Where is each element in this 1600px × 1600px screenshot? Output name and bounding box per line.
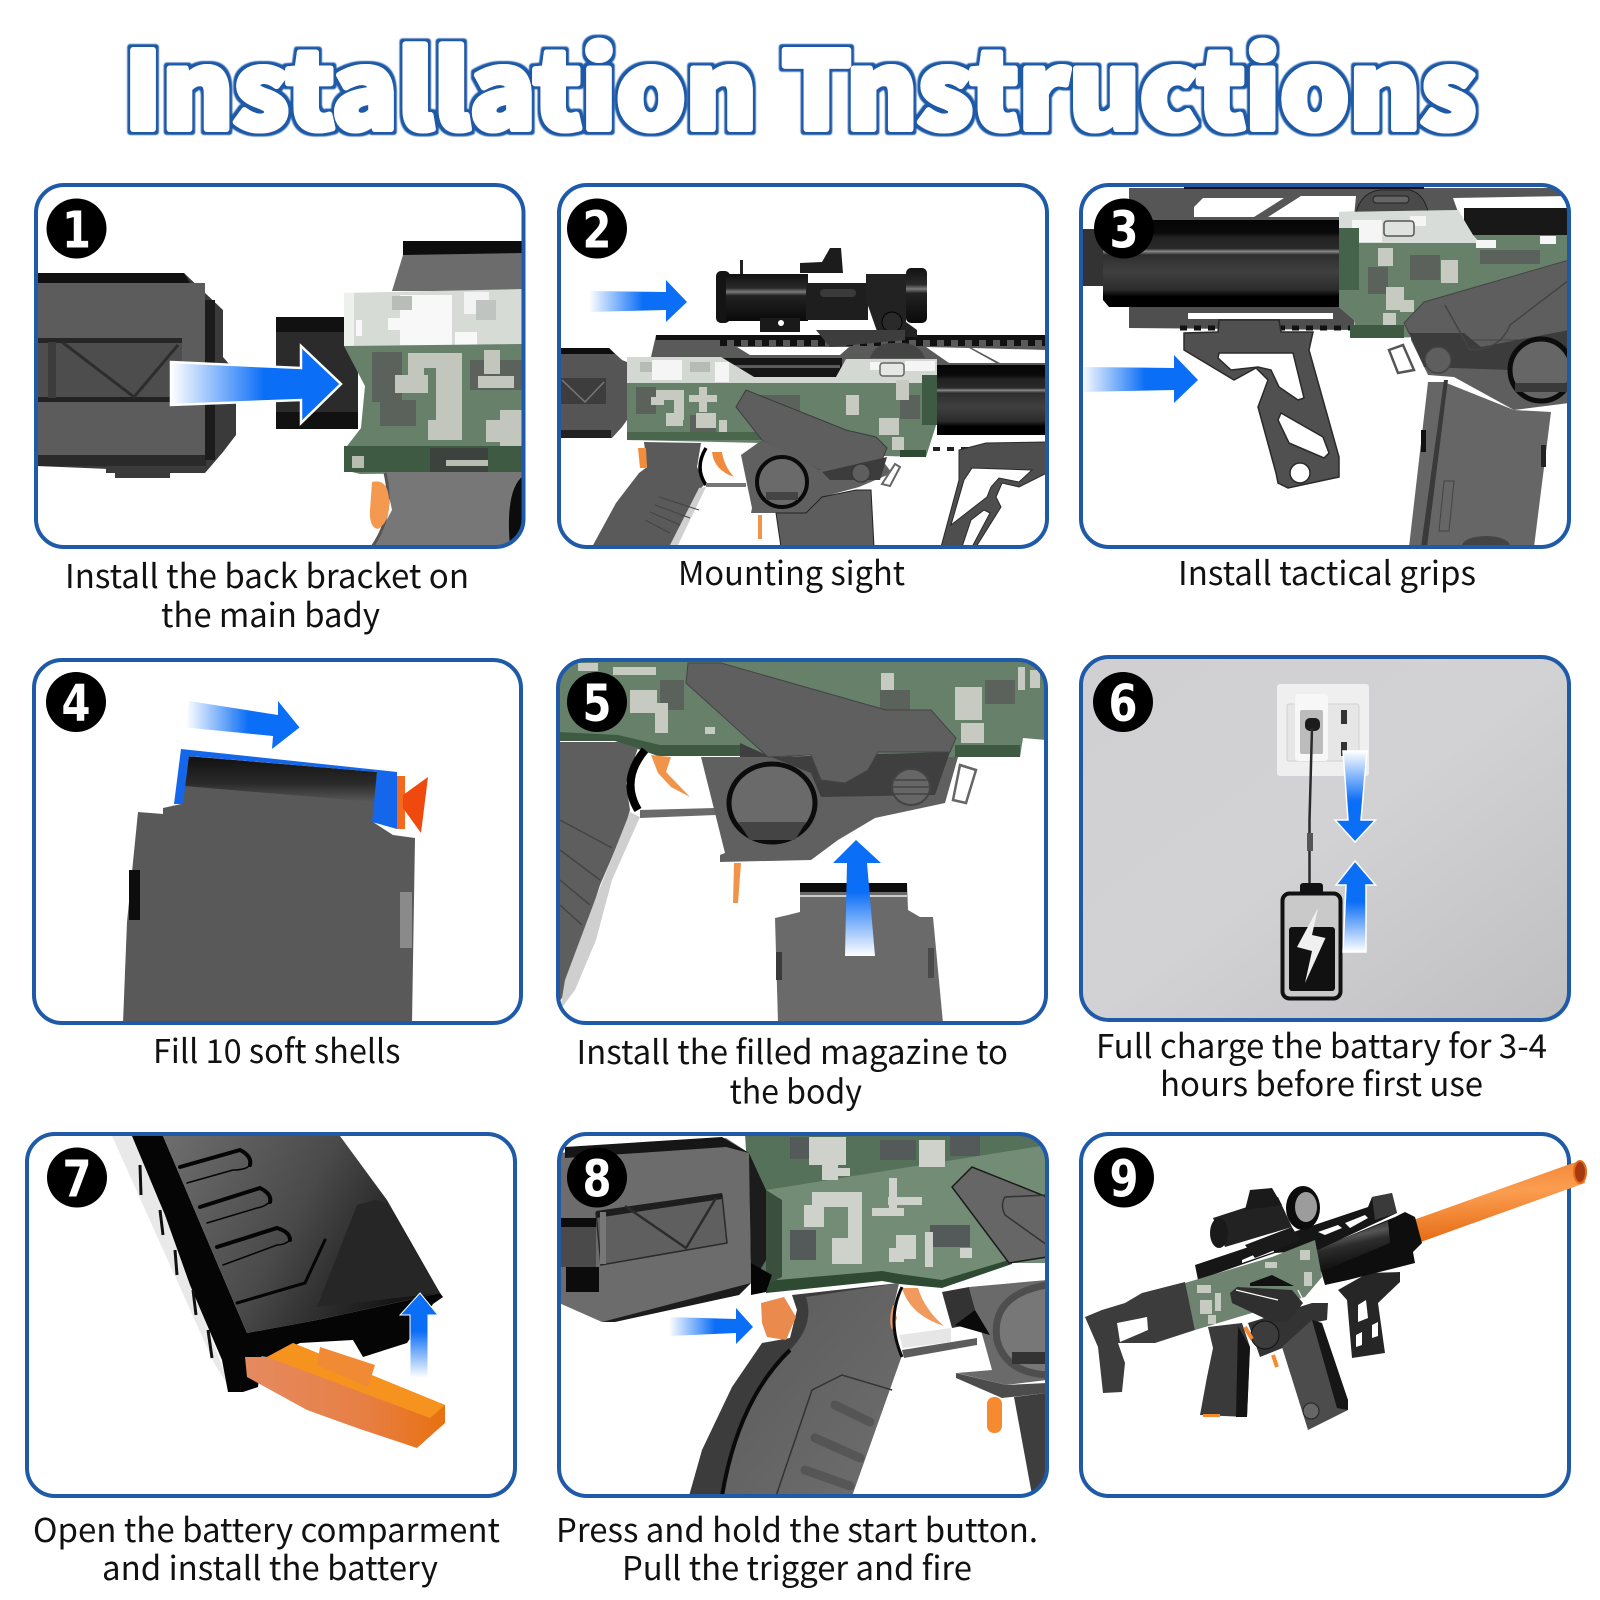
magazine [776, 490, 874, 547]
wall outlet [1277, 684, 1369, 776]
stock stub [559, 348, 627, 438]
panel: step 8 start [559, 1134, 1047, 1496]
magazine piece [1014, 1393, 1047, 1495]
number 3 [1094, 198, 1154, 260]
grip [558, 742, 640, 1010]
caption 1 [65, 550, 469, 637]
lever and lower receiver [1389, 260, 1572, 410]
lever [686, 663, 956, 783]
camo body [1185, 1240, 1322, 1330]
black barrel [1315, 1212, 1422, 1285]
caption 8: Pull the trigger and fire [622, 1542, 972, 1590]
scope [1210, 1186, 1320, 1258]
arrow [833, 840, 881, 956]
panel: step 6 charge battery [1081, 657, 1569, 1020]
connecting bar [640, 808, 716, 818]
caption 5: the body [730, 1066, 862, 1114]
caption 8: Press and hold the start button. [556, 1504, 1038, 1552]
number 9 [1094, 1148, 1154, 1210]
panel: step 3 tactical grips [1081, 185, 1572, 556]
panel: step 4 fill soft shells [34, 660, 521, 1023]
grip end panel [317, 1200, 440, 1307]
panel: step 9 assembled blaster [1081, 1134, 1586, 1496]
dial and strap [892, 765, 976, 805]
grip spine [112, 1136, 262, 1392]
sight [716, 248, 927, 347]
grip [372, 472, 523, 547]
orange rod [758, 515, 762, 539]
number 6 [1093, 672, 1153, 734]
number 8: 8 [582, 1150, 612, 1210]
trigger guard [630, 750, 645, 810]
trigger guard [894, 1287, 902, 1357]
upper receiver [392, 241, 523, 291]
camo body [745, 1134, 1047, 1293]
number 2 [567, 198, 627, 260]
panel: step 1 back bracket [36, 185, 524, 547]
barrel [1103, 220, 1339, 307]
panel border [1081, 185, 1569, 547]
caption 2: Mounting sight [678, 547, 905, 595]
panel border [559, 185, 1047, 547]
under rail [1129, 307, 1354, 330]
number 2: 2 [582, 202, 612, 260]
magazine [1409, 380, 1551, 556]
grip slots [180, 1150, 325, 1303]
panel border [1081, 657, 1569, 1020]
trigger [651, 755, 690, 797]
panel border [558, 660, 1046, 1023]
caption 4: Fill 10 soft shells [153, 1025, 400, 1073]
grip body [163, 1136, 440, 1333]
number 5: 5 [582, 675, 612, 734]
top rail frame [651, 335, 1047, 377]
orange rod [987, 1397, 1002, 1433]
receiver [1248, 1303, 1328, 1357]
panel: step 5 install magazine [558, 660, 1046, 1023]
caption 5: Install the filled magazine to [576, 1026, 1008, 1074]
number 8 [567, 1148, 627, 1210]
number 4 [46, 672, 106, 734]
rail [1195, 1193, 1397, 1280]
number 9: 9 [1110, 1150, 1138, 1210]
lever [736, 390, 887, 470]
arrow [669, 1308, 753, 1344]
tactical grip [1184, 320, 1339, 488]
number 1 [46, 198, 106, 260]
barrel [937, 365, 1047, 435]
camo body [627, 357, 937, 457]
tactical grip [941, 442, 1047, 547]
blue soft shell [174, 749, 397, 829]
caption 1: the main bady [161, 589, 380, 637]
caption 3: Install tactical grips [1178, 547, 1476, 595]
connecting bar [899, 1328, 977, 1358]
caption 7 [33, 1504, 500, 1590]
arrow [186, 701, 300, 749]
stock [1085, 1282, 1195, 1393]
top frame [1129, 186, 1569, 235]
grip [689, 1283, 901, 1496]
orange button [761, 1297, 796, 1340]
arrow down [1335, 751, 1376, 842]
magazine [123, 756, 415, 1023]
battery icon [1282, 883, 1340, 998]
panel border [27, 1134, 515, 1496]
number 4: 4 [62, 675, 90, 734]
under rail [933, 447, 968, 451]
caption 7: Open the battery comparment [33, 1504, 500, 1552]
number 7: 7 [62, 1150, 92, 1210]
arrow [400, 1293, 438, 1378]
camo body [344, 289, 523, 474]
trigger [890, 1288, 944, 1330]
pistol grip [1200, 1323, 1250, 1417]
camo body [558, 660, 1046, 757]
title: Installation Tnstructions [124, 6, 1476, 160]
lower receiver [701, 757, 958, 862]
panel border [36, 185, 524, 547]
number 3: 3 [1110, 202, 1138, 260]
panel: step 7 battery [27, 1134, 515, 1496]
lower receiver [942, 1280, 1047, 1398]
grip [592, 442, 706, 547]
orange battery [245, 1343, 445, 1448]
panel border [34, 660, 521, 1023]
dark battery bay [247, 1293, 443, 1357]
number 7 [47, 1148, 107, 1210]
orange rod [733, 863, 741, 903]
trigger guard and trigger [638, 448, 746, 487]
arrow up [1336, 861, 1376, 952]
lever [1230, 1287, 1304, 1322]
caption 5 [576, 1026, 1008, 1114]
caption 8 [556, 1504, 1038, 1590]
magazine [1282, 1320, 1348, 1430]
arrow [589, 280, 687, 322]
orange barrel [1405, 1161, 1586, 1243]
number 1: 1 [62, 202, 91, 260]
caption 7: and install the battery [102, 1542, 438, 1590]
caption 6: Full charge the battary for 3-4 [1096, 1020, 1547, 1068]
panel border [1081, 1134, 1569, 1496]
muzzle [1083, 229, 1103, 286]
caption 1: Install the back bracket on [65, 550, 469, 598]
orange details [1245, 1327, 1277, 1367]
arrow [171, 346, 341, 423]
lower receiver [741, 440, 900, 513]
suction tip [397, 776, 428, 833]
caption 6: hours before first use [1160, 1058, 1483, 1106]
magazine [775, 883, 943, 1023]
arrow [1081, 355, 1198, 403]
lever [952, 1167, 1047, 1263]
front grip [1338, 1272, 1400, 1358]
charging cable [1305, 718, 1320, 885]
dark band [740, 743, 950, 797]
number 6: 6 [1108, 675, 1138, 734]
panel border [559, 1134, 1047, 1496]
number 5 [567, 672, 627, 734]
stock block [559, 1137, 772, 1322]
back bracket block [36, 273, 236, 478]
black connector [276, 317, 358, 429]
panel: step 2 mounting sight [559, 185, 1047, 547]
caption 6 [1096, 1020, 1547, 1106]
camo body [1339, 210, 1569, 345]
magazine ring [729, 764, 815, 842]
orange button [370, 481, 389, 529]
